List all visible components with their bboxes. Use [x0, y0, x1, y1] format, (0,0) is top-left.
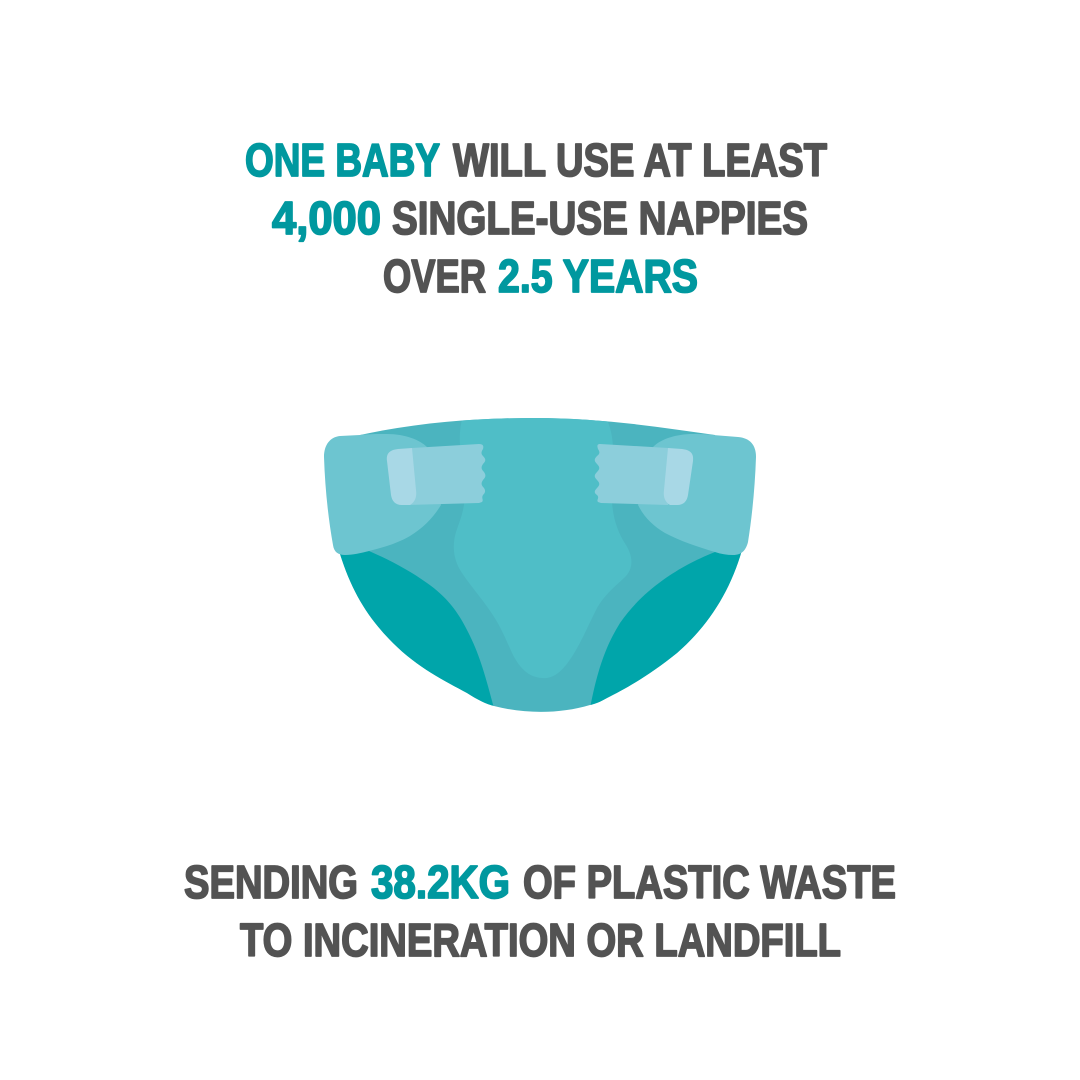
heading: one baby will use 4,000 nappies: SINGLE-USE NAPPIES: [392, 192, 808, 244]
left leg band: [340, 551, 494, 706]
left tape: [400, 444, 485, 505]
right wing: [638, 434, 756, 555]
heading: one baby will use 4,000 nappies: 4,000: [272, 192, 381, 244]
nappy body: [340, 418, 742, 712]
heading: one baby will use 4,000 nappies: 2.5 YEARS: [498, 250, 698, 302]
right tape: [595, 444, 675, 505]
caption: 38.2kg of plastic waste: [184, 856, 896, 966]
left tape tab: [387, 448, 416, 505]
right tape tab: [664, 448, 693, 505]
caption: 38.2kg of plastic waste: 38.2KG: [371, 856, 510, 908]
left wing: [324, 434, 441, 555]
right leg band: [590, 552, 742, 705]
caption: 38.2kg of plastic waste: TO INCINERATION OR LANDFILL: [240, 914, 841, 966]
heading: one baby will use 4,000 nappies: ONE BABY: [245, 134, 440, 186]
heading: one baby will use 4,000 nappies: WILL USE AT LEAST: [453, 134, 827, 186]
caption: 38.2kg of plastic waste: OF PLASTIC WASTE: [523, 856, 896, 908]
heading: one baby will use 4,000 nappies: [245, 134, 827, 302]
icon: nappy: [324, 410, 760, 715]
nappy centre panel: [454, 410, 631, 678]
heading: one baby will use 4,000 nappies: OVER: [383, 250, 486, 302]
caption: 38.2kg of plastic waste: SENDING: [184, 856, 358, 908]
